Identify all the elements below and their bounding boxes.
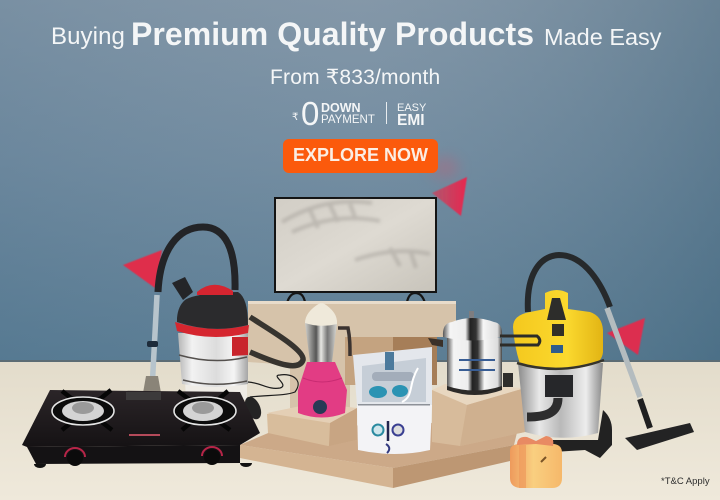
zero down payment badge: ₹ (292, 112, 298, 123)
burner: right (173, 391, 237, 430)
easy EMI label (397, 102, 426, 129)
heading: Made Easy (544, 24, 662, 50)
heading: Buying (51, 23, 125, 50)
terms note: *T&C Apply (661, 476, 710, 487)
vacuum cleaner: yellow and steel (500, 255, 694, 458)
divider (386, 102, 387, 124)
zero down payment badge: DOWN (321, 101, 361, 115)
television (274, 197, 437, 303)
easy EMI label: EASY (397, 102, 426, 114)
mixer grinder (298, 303, 350, 418)
price line: From ₹833/month (270, 66, 440, 89)
knobs (65, 447, 222, 466)
pressure cooker (428, 311, 513, 395)
red flag right (607, 318, 645, 355)
gift box (510, 436, 562, 488)
bottom slab (240, 420, 520, 468)
back box (248, 302, 456, 408)
button: explore now: EXPLORE NOW (293, 145, 428, 165)
red flag top (431, 157, 467, 216)
burner: left (51, 390, 115, 430)
button: explore now (283, 139, 438, 173)
background wall (0, 0, 720, 362)
zero down payment badge: PAYMENT (321, 114, 375, 126)
water purifier (353, 347, 432, 454)
middle left box (267, 405, 357, 446)
right box (432, 390, 525, 446)
gas stove (22, 390, 260, 468)
cardboard platforms (240, 301, 525, 488)
red flag left (123, 250, 162, 288)
floor (0, 360, 720, 500)
vacuum cleaner: red and steel (143, 227, 303, 422)
heading: Premium Quality Products (131, 16, 534, 52)
heading (51, 16, 662, 52)
zero down payment badge (292, 95, 375, 132)
easy EMI label: EMI (397, 112, 425, 129)
zero down payment badge: 0 (301, 95, 319, 132)
